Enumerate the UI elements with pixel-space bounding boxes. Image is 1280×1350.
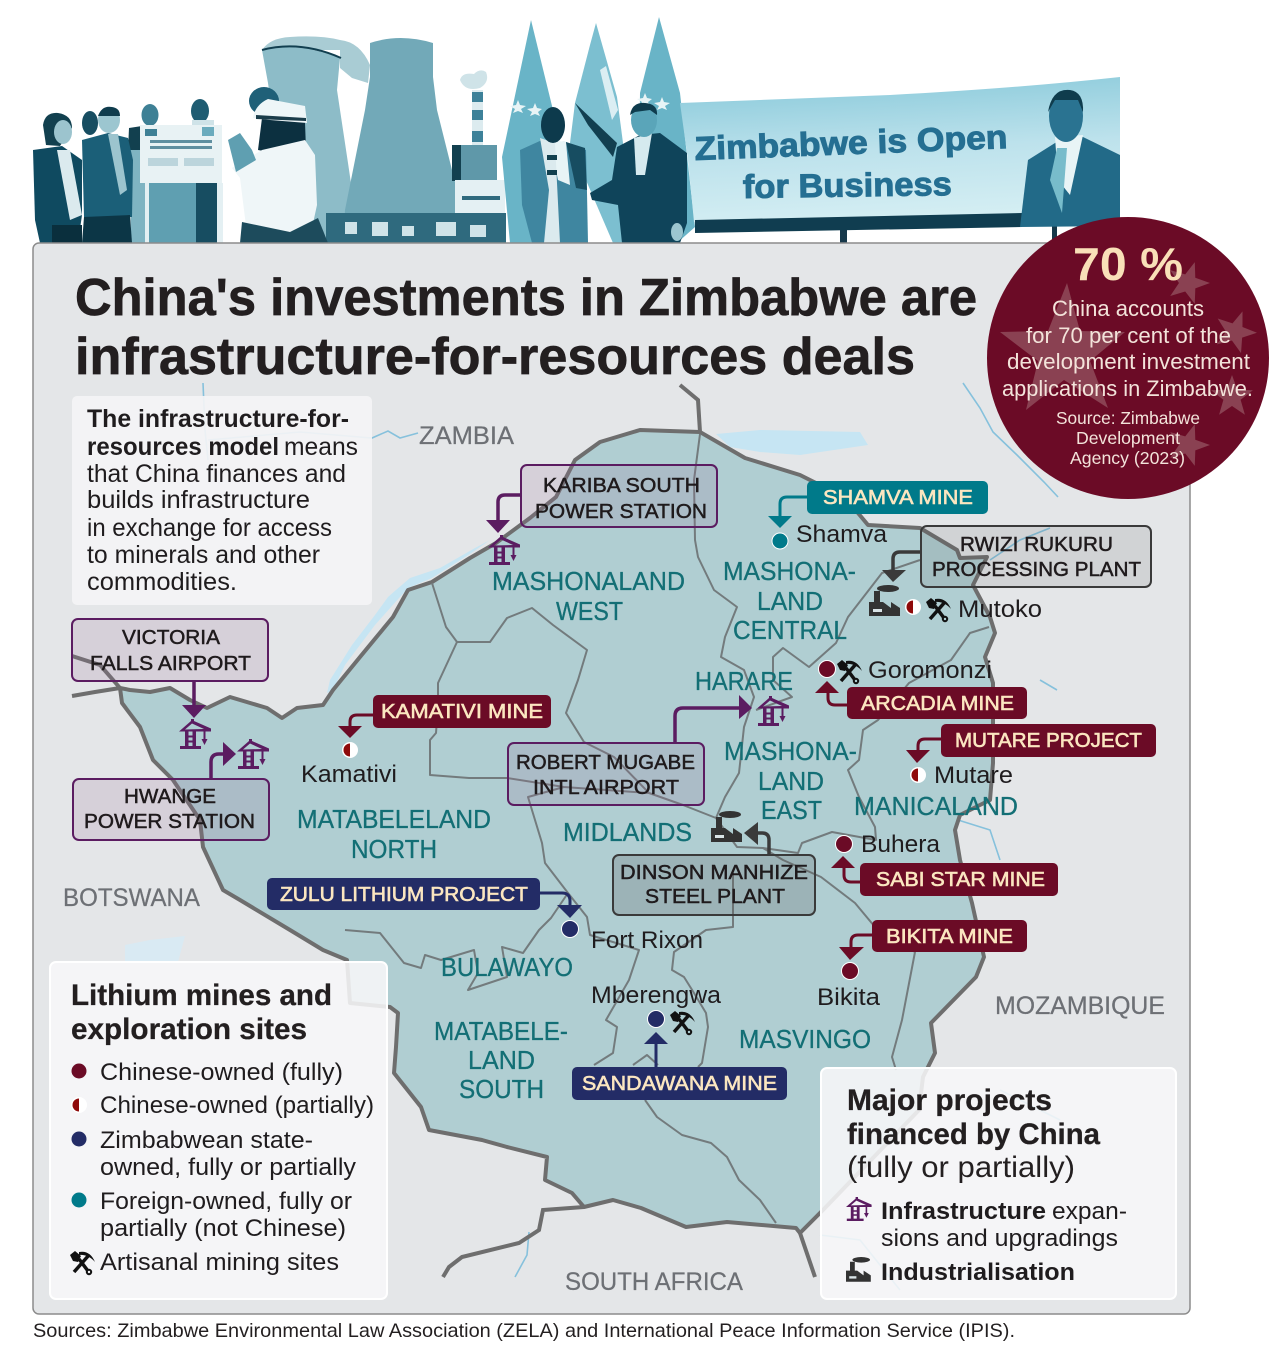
province labels: HARARE xyxy=(695,666,793,696)
legend: major projects: financed by China xyxy=(847,1118,1100,1151)
legend: lithium mines: Lithium mines and xyxy=(71,979,332,1012)
province labels: MASHONA- xyxy=(724,736,857,766)
mine: Bikita: BIKITA MINE xyxy=(886,925,1013,948)
project: Zulu Lithium, Fort Rixon xyxy=(267,878,703,954)
project: Zulu Lithium, Fort Rixon: ZULU LITHIUM PROJECT xyxy=(280,883,528,906)
province labels: SOUTH xyxy=(459,1074,544,1104)
province labels xyxy=(297,556,1018,1104)
legend: major projects xyxy=(821,1068,1176,1299)
legend: lithium mines: Artisanal mining sites xyxy=(100,1249,339,1276)
mine: Bikita xyxy=(817,920,1027,1011)
title: infrastructure-for-resources deals xyxy=(75,328,915,386)
country outline xyxy=(120,430,995,1233)
province labels: MATABELELAND xyxy=(297,804,491,834)
project: Victoria Falls Airport: VICTORIA xyxy=(122,626,220,649)
province labels: CENTRAL xyxy=(733,615,847,645)
billboard: for Business xyxy=(743,165,952,205)
intro text panel: builds infrastructure xyxy=(87,486,310,514)
legend: major projects: Industrialisation xyxy=(881,1259,1075,1286)
province labels: MASVINGO xyxy=(739,1024,871,1054)
mine: Kamativi: Kamativi xyxy=(301,761,397,788)
legend: major projects: (fully or partially) xyxy=(847,1151,1075,1184)
intro text panel xyxy=(72,396,372,605)
province labels: MASHONALAND xyxy=(492,566,685,596)
legend: lithium mines: Chinese-owned (partially) xyxy=(100,1092,374,1119)
project: Rwizi Rukuru Processing Plant: RWIZI RUKURU xyxy=(960,533,1113,556)
mine: Kamativi: KAMATIVI MINE xyxy=(381,700,543,723)
legend: lithium mines: Zimbabwean state- xyxy=(100,1127,313,1154)
project: Hwange Power Station: HWANGE xyxy=(124,785,216,808)
province labels: MATABELE- xyxy=(434,1016,568,1046)
callout: 70 per cent: China accounts xyxy=(1052,296,1204,321)
country labels: MOZAMBIQUE xyxy=(995,992,1165,1020)
callout: 70 per cent xyxy=(987,217,1269,499)
intro text panel: to minerals and other xyxy=(87,541,320,569)
country labels xyxy=(63,422,1165,1296)
project: Victoria Falls Airport: FALLS AIRPORT xyxy=(90,652,251,675)
mine: Arcadia, Goromonzi xyxy=(815,657,1027,719)
project: Dinson Manhize Steel Plant: STEEL PLANT xyxy=(645,885,785,908)
province labels: LAND xyxy=(757,586,823,616)
legend: major projects: Infrastructure xyxy=(881,1198,1046,1225)
intro text panel: that China finances and xyxy=(87,460,346,488)
legend: lithium mines: Foreign-owned, fully or xyxy=(100,1188,352,1215)
project: Dinson Manhize Steel Plant xyxy=(613,811,815,915)
legend: lithium mines: Chinese-owned (fully) xyxy=(100,1059,343,1086)
intro text panel: resources model xyxy=(87,433,279,461)
site: Mutoko xyxy=(905,596,1042,623)
project: Victoria Falls Airport xyxy=(72,619,268,749)
intro text panel: in exchange for access xyxy=(87,514,332,542)
province labels: NORTH xyxy=(351,834,437,864)
woman in white jacket with hat xyxy=(228,87,328,243)
country labels: BOTSWANA xyxy=(63,884,200,912)
project: Kariba South Power Station: KARIBA SOUTH xyxy=(543,474,700,497)
chimney and plant xyxy=(452,70,505,213)
callout: 70 per cent: 70 % xyxy=(1073,238,1183,290)
mine: Kamativi xyxy=(301,695,551,788)
country labels: ZAMBIA xyxy=(419,422,514,450)
mine: Sabi Star, Buhera: Buhera xyxy=(861,831,941,858)
intro text panel: commodities. xyxy=(87,568,237,596)
province labels: LAND xyxy=(758,766,824,796)
province labels: LAND xyxy=(468,1045,535,1075)
project: Robert Mugabe Intl Airport: INTL AIRPORT xyxy=(533,776,679,799)
title xyxy=(75,269,977,386)
mine: Sabi Star, Buhera: SABI STAR MINE xyxy=(876,868,1045,891)
callout: 70 per cent: Development xyxy=(1076,428,1180,448)
legend: major projects: expan- xyxy=(1052,1198,1127,1225)
mine: Shamva: Shamva xyxy=(796,521,888,548)
group with signboard xyxy=(33,99,223,243)
mine: Bikita: Bikita xyxy=(817,984,881,1011)
mine: Mutare project: MUTARE PROJECT xyxy=(955,729,1142,752)
mine: Arcadia, Goromonzi: Goromonzi xyxy=(868,657,992,684)
mine: Sandawana, Mberengwa: SANDAWANA MINE xyxy=(582,1072,777,1095)
mine: Shamva: SHAMVA MINE xyxy=(823,486,973,509)
mine: Shamva xyxy=(768,481,988,549)
province labels: MANICALAND xyxy=(854,791,1018,821)
project: Dinson Manhize Steel Plant: DINSON MANHIZE xyxy=(620,861,808,884)
mine: Sabi Star, Buhera xyxy=(831,831,1058,896)
billboard slogan: Zimbabwe is Open xyxy=(694,118,1008,167)
project: Robert Mugabe Intl Airport xyxy=(508,695,789,805)
project: Rwizi Rukuru Processing Plant xyxy=(869,526,1151,616)
province labels: MIDLANDS xyxy=(563,817,692,847)
province labels: EAST xyxy=(761,795,822,825)
project: Hwange Power Station xyxy=(73,739,269,840)
project: Hwange Power Station: POWER STATION xyxy=(84,810,255,833)
title: China's investments in Zimbabwe are xyxy=(75,269,977,327)
country labels: SOUTH AFRICA xyxy=(565,1268,743,1296)
sources: Sources: Zimbabwe Environmental Law Association (ZELA) and International Peace Information Service (IPIS). xyxy=(33,1320,1015,1342)
project: Rwizi Rukuru Processing Plant: PROCESSING PLANT xyxy=(932,558,1141,581)
site: Mutoko: Mutoko xyxy=(958,596,1042,623)
province labels: BULAWAYO xyxy=(441,952,573,982)
legend: lithium mines xyxy=(50,962,387,1299)
legend: major projects: sions and upgradings xyxy=(881,1225,1118,1252)
flags xyxy=(502,17,695,243)
legend: lithium mines: owned, fully or partially xyxy=(100,1154,356,1181)
province labels: MASHONA- xyxy=(723,556,856,586)
main grey panel xyxy=(33,243,1190,1314)
project: Kariba South Power Station: POWER STATION xyxy=(535,500,707,523)
province borders xyxy=(432,583,716,818)
map: Zimbabwe provinces xyxy=(72,385,995,1277)
mine: Sandawana, Mberengwa: Mberengwa xyxy=(591,982,722,1009)
legend: lithium mines: partially (not Chinese) xyxy=(100,1215,346,1242)
project: Kariba South Power Station xyxy=(486,465,717,565)
cooling towers xyxy=(262,36,506,243)
province labels: WEST xyxy=(556,596,623,626)
handshake: two presidents xyxy=(520,103,687,243)
callout: 70 per cent: development investment xyxy=(1007,349,1250,374)
intro text panel: means xyxy=(284,433,358,461)
callout: 70 per cent: Agency (2023) xyxy=(1070,448,1185,468)
intro text panel: The infrastructure-for- xyxy=(87,405,349,433)
legend: major projects: Major projects xyxy=(847,1084,1052,1117)
legend: lithium mines: exploration sites xyxy=(71,1013,307,1046)
mine: Arcadia, Goromonzi: ARCADIA MINE xyxy=(861,692,1014,715)
photo collage banner xyxy=(33,17,1120,243)
rivers and water bodies xyxy=(125,383,1060,1290)
callout: 70 per cent: Source: Zimbabwe xyxy=(1056,408,1200,428)
mine: Mutare project xyxy=(906,724,1156,789)
mine: Mutare project: Mutare xyxy=(934,762,1013,789)
callout: 70 per cent: for 70 per cent of the xyxy=(1026,323,1231,348)
callout: 70 per cent: applications in Zimbabwe. xyxy=(1002,376,1253,401)
project: Zulu Lithium, Fort Rixon: Fort Rixon xyxy=(591,927,703,954)
mine: Sandawana, Mberengwa xyxy=(572,982,787,1100)
project: Robert Mugabe Intl Airport: ROBERT MUGABE xyxy=(516,751,695,774)
billboard xyxy=(680,77,1120,243)
